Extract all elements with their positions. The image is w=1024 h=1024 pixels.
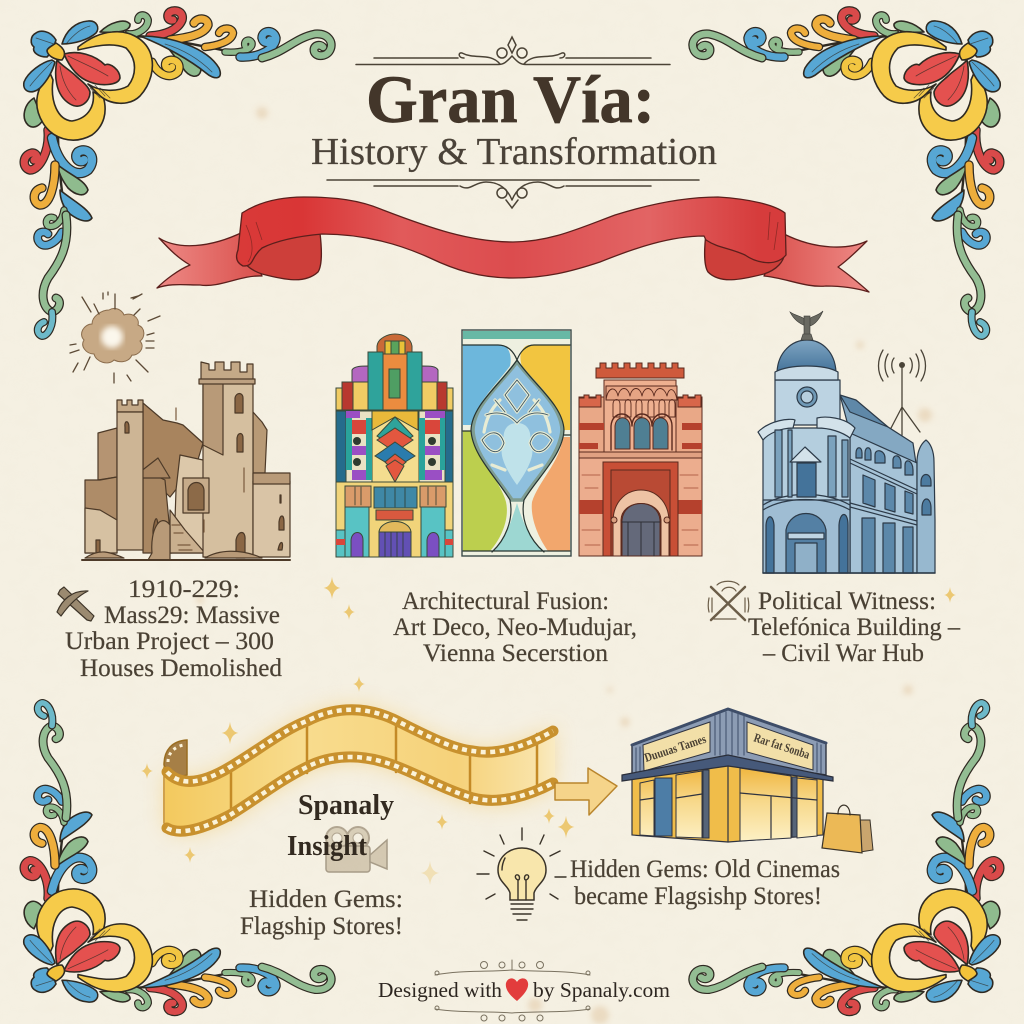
text: political witness: Political Witness: [758,588,936,615]
text: architectural fusion [393,588,637,667]
text: political witness: – Civil War Hub [762,640,924,667]
left ribbon tail [157,232,262,288]
right store sign: Rar fat Sonba [752,731,812,762]
lightbulb icon [477,828,566,920]
text: architectural fusion: Art Deco, Neo-Mudujar, [393,614,637,641]
footer credit: by Spanaly.com [533,978,670,1002]
geometric facade: Art Deco building [336,334,453,557]
text: architectural fusion: Architectural Fusion: [402,588,609,615]
right ribbon tail [764,234,869,292]
store canopy [622,755,833,781]
text: Spanaly Insight: Spanaly [298,790,394,821]
left store sign: Duuuas Tames [643,732,708,765]
main ribbon band [237,197,786,278]
left store sign [643,722,710,771]
right store sign [747,722,813,770]
text: Spanaly Insight: Insight [287,831,368,862]
text: flagship stores [240,886,403,940]
antenna with signal waves [878,350,926,435]
footer credit: Designed with [378,978,502,1002]
arrow to store [555,768,617,815]
corner ornament: bottom right [693,703,1000,1012]
text: urban project: Urban Project – 300 [65,628,274,655]
corner ornament: top left [24,11,331,336]
Neo-Mudejar brick building [579,363,702,556]
right ribbon fold [705,233,785,280]
ruined building illustration [82,362,290,560]
title flourish: top [356,37,670,64]
decorative sparkles [141,577,956,885]
rooftop statue [790,311,823,340]
corner ornament: bottom left [24,703,331,1012]
subtitle: History & Transformation [311,131,717,173]
text: architectural fusion: Vienna Secerstion [423,640,608,667]
text: political witness: Telefónica Building – [748,614,960,641]
left ribbon fold [238,233,321,280]
corner ornament: top right [693,11,1000,336]
text: flagship stores: Flagship Stores! [240,913,403,940]
store roof fascia [632,709,826,776]
footer flourish: bottom [435,1006,590,1021]
text: urban project: 1910-229: [128,576,240,603]
footer credit [378,978,670,1002]
text: hidden gems [570,856,840,910]
footer flourish: top [435,960,590,975]
text: urban project: Mass29: Massive [104,602,280,629]
store walls and windows [632,762,823,842]
storefront illustration [622,709,873,853]
pickaxe icon [57,587,94,621]
text: Spanaly Insight [287,790,394,862]
text: political witness [748,588,960,667]
text: hidden gems: Hidden Gems: Old Cinemas [570,856,840,883]
title flourish: bottom [327,180,699,208]
film strip with glow [164,706,555,834]
stained glass panel [462,330,571,556]
crossed tools icon [708,581,749,620]
icon: heart [506,978,528,1001]
explosion icon [70,292,160,383]
shopping bags [822,805,873,853]
title: Gran Vía: [366,61,655,137]
text: flagship stores: Hidden Gems: [249,886,403,913]
Telefónica building illustration [758,311,935,573]
text: hidden gems: became Flagsishp Stores! [574,883,822,910]
text: urban project [65,576,283,682]
text: urban project: Houses Demolished [80,655,283,682]
movie camera icon [326,827,387,872]
red ribbon banner [157,197,869,292]
